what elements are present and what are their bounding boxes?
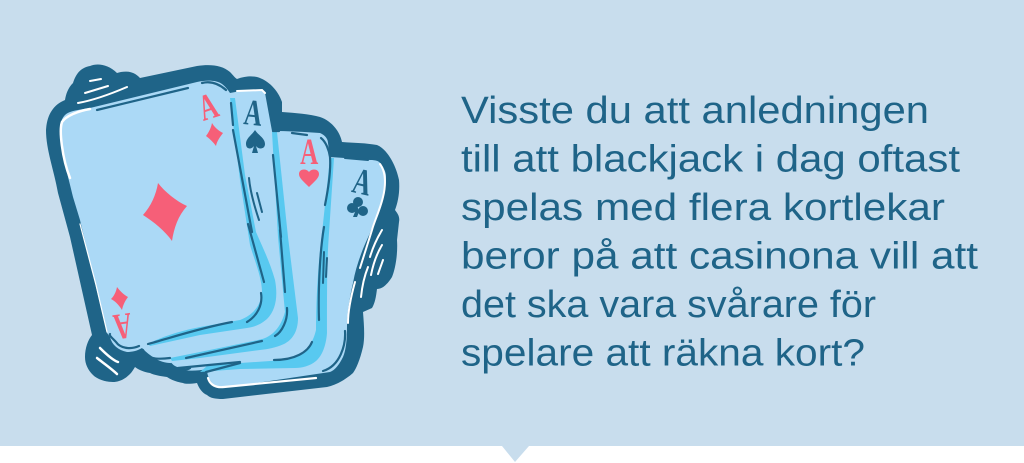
icon: top diamond [206,123,223,146]
white highlight lines [61,79,385,387]
text block: fun fact [461,90,978,374]
label: ace of spades: A [242,91,265,134]
illustration: four aces playing cards [46,64,399,399]
card faces [60,81,386,388]
icon: bottom diamond [111,287,128,310]
text block: fun fact: Visste du att anledningen [461,90,929,132]
card silhouette outline [46,64,399,399]
label: ace of diamonds bottom: A [111,305,135,348]
text block: fun fact: det ska vara svårare för [461,284,876,326]
dark ink detail lines [97,82,368,372]
icon: large diamond [143,183,187,241]
text block: fun fact: spelas med flera kortlekar [461,187,945,229]
cyan card edge bands [148,98,334,372]
label: ace of clubs: A [349,160,376,204]
label: ace of hearts: A [300,131,318,172]
icon: club [347,197,368,217]
text block: fun fact: till att blackjack i dag oftast [461,138,960,180]
icon: heart [299,170,319,187]
icon: spade [246,130,265,153]
text block: fun fact: spelare att räkna kort? [461,332,865,374]
text block: fun fact: beror på att casinona vill att [461,236,978,278]
label: ace of diamonds top: A [193,84,223,129]
